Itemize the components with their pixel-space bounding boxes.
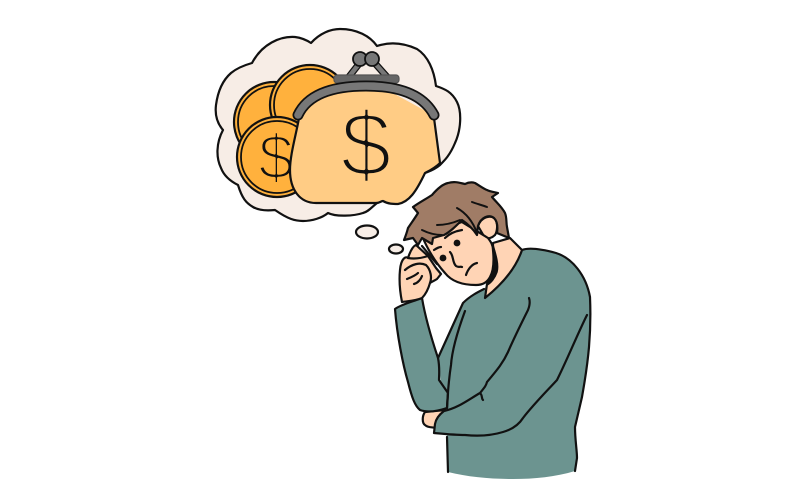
purse clasp	[334, 52, 399, 83]
raised hand	[400, 245, 441, 302]
crossed forearm	[434, 315, 587, 436]
neck	[485, 238, 522, 298]
purse frame	[298, 86, 434, 115]
coins	[234, 65, 350, 197]
sweater fold	[447, 311, 465, 408]
purse body	[290, 86, 440, 204]
coin: back left	[234, 82, 314, 162]
hair strands	[422, 202, 487, 235]
ear	[478, 217, 497, 238]
fingers	[405, 246, 437, 284]
coin: back top	[270, 65, 350, 145]
thought bubble: large	[356, 226, 378, 238]
thought bubble: small	[389, 244, 403, 254]
man	[395, 182, 590, 479]
nose	[450, 252, 462, 267]
eyebrows	[434, 230, 462, 250]
hair	[404, 182, 509, 245]
mouth	[466, 263, 477, 275]
thought cloud	[216, 29, 460, 221]
sweater torso	[438, 249, 590, 479]
face	[422, 222, 494, 285]
neck shadow	[487, 245, 498, 285]
eye: left	[440, 255, 446, 261]
coin purse	[290, 52, 440, 204]
coin: front with dollar sign: $	[258, 123, 294, 193]
eye: right	[454, 240, 460, 246]
lower hand	[423, 410, 445, 428]
purse dollar sign: $	[340, 94, 392, 196]
raised sleeve	[395, 298, 448, 411]
